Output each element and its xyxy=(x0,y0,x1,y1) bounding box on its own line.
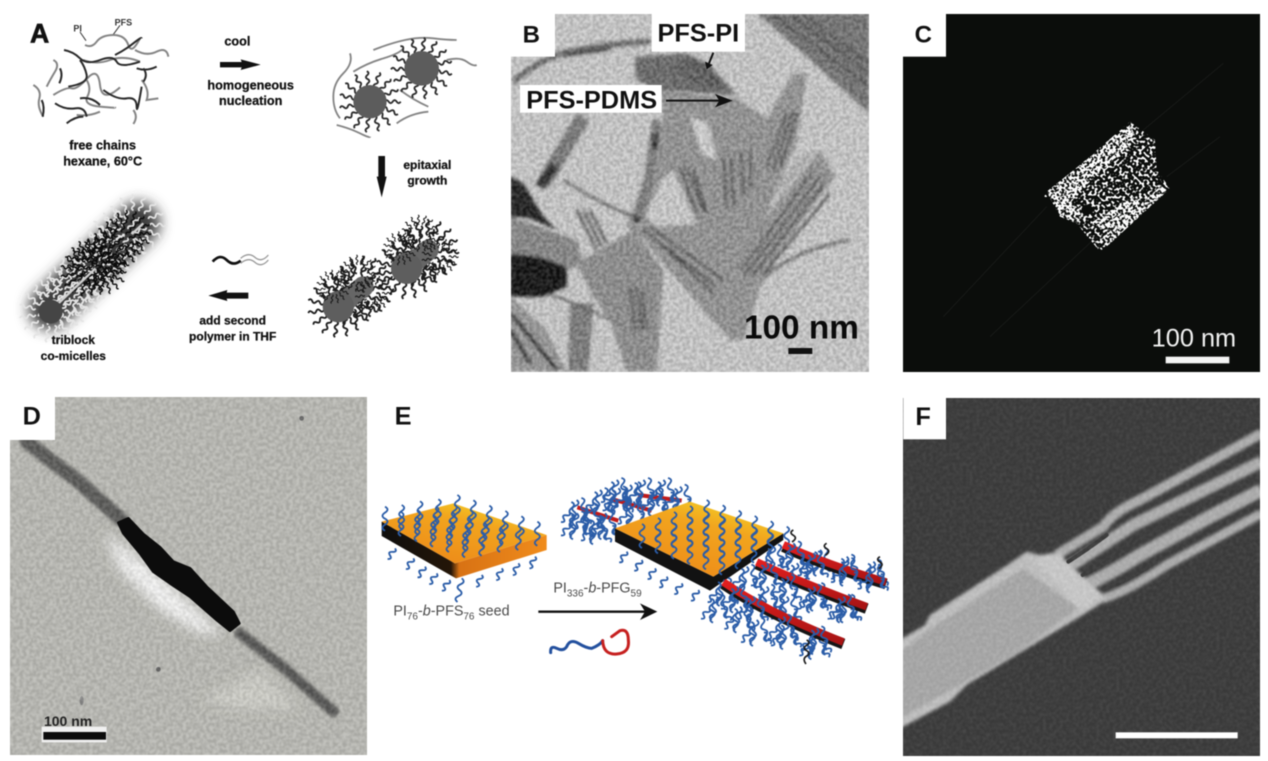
corona chains behind front fibres xyxy=(699,544,889,659)
label: seed polymer: b-PFS xyxy=(423,604,463,620)
corona rings crossing fibres xyxy=(719,530,889,664)
scale bar: 100 nm: 100 nm xyxy=(744,310,859,347)
faint rod outlines xyxy=(943,63,1223,337)
scale bar: 100 nm: 100 nm xyxy=(44,713,92,729)
seed platelet with corona chains xyxy=(382,495,547,602)
free polymer chains with PI and PFS labels: PI xyxy=(73,23,82,33)
panel B: TEM micrograph xyxy=(510,10,869,372)
wide ribbon body xyxy=(900,552,1108,728)
dark central block xyxy=(118,518,239,631)
step label: epitaxial growth xyxy=(403,158,451,187)
icon: diblock copolymer chain xyxy=(551,630,629,654)
label: added polymer: 336 xyxy=(567,589,584,600)
scale bar: 100 nm xyxy=(42,713,107,742)
bright halo xyxy=(103,532,300,710)
front fibres xyxy=(723,545,886,644)
label: added polymer: b-PFG xyxy=(588,581,631,597)
step label: epitaxial growth: epitaxial xyxy=(403,158,451,172)
arrow: left xyxy=(208,290,248,301)
label: seed polymer: - xyxy=(418,604,423,620)
panel letter A: A xyxy=(30,19,49,49)
panel letter F xyxy=(903,398,946,439)
growing platelet with corona chains xyxy=(615,500,789,602)
callout: PFS-PDMS xyxy=(520,85,733,115)
step label: cool, homogeneous nucleation: cool xyxy=(224,34,250,48)
free polymer chains with PI and PFS labels xyxy=(33,17,168,124)
label: seed polymer: seed xyxy=(474,604,510,620)
step label: add second polymer: polymer in THF xyxy=(189,330,276,344)
triblock co-micelle rod with glow xyxy=(20,194,166,342)
callout: PFS-PDMS: PFS-PDMS xyxy=(526,87,657,115)
panel letter D xyxy=(7,395,55,440)
free polymer chains with PI and PFS labels: PFS xyxy=(115,17,132,27)
step label: add second polymer: add second xyxy=(199,314,266,328)
label: added polymer: - xyxy=(584,581,589,597)
step label: epitaxial growth: growth xyxy=(407,173,447,187)
dark gaps between fingers xyxy=(1066,532,1110,578)
panel letter B xyxy=(510,10,555,57)
diagonal rod xyxy=(27,442,333,712)
label: seed polymer: 76 xyxy=(407,612,418,623)
caption: triblock co-micelles: triblock xyxy=(52,333,95,347)
scale bar xyxy=(1116,732,1238,738)
step label: cool, homogeneous nucleation: homogeneous xyxy=(207,78,294,92)
panel letter F: F xyxy=(915,403,931,431)
bright fingers xyxy=(1057,433,1262,598)
arrow: down xyxy=(377,156,387,197)
panel letter C xyxy=(901,11,946,57)
panel C: elemental map on black xyxy=(901,11,1260,372)
label: seed polymer: 76 xyxy=(463,612,475,623)
caption: free chains xyxy=(63,139,142,168)
caption: triblock co-micelles xyxy=(41,333,106,363)
speckled central bright region xyxy=(1043,122,1170,252)
panel letter C: C xyxy=(915,21,932,48)
panel F: SEM micrograph xyxy=(900,398,1262,756)
caption: free chains: free chains xyxy=(69,139,136,153)
label: added polymer: PI xyxy=(553,581,567,597)
step label: add second polymer xyxy=(189,314,276,344)
label: added polymer: 59 xyxy=(631,589,642,600)
arrow: right xyxy=(220,59,261,70)
panel letter D: D xyxy=(23,403,41,431)
label: seed polymer: PI xyxy=(393,604,407,620)
panel A: triblock co-micelle formation scheme xyxy=(20,17,477,363)
panel letter E: E xyxy=(395,403,412,431)
panel E: seeded growth schematic xyxy=(382,403,889,664)
panel letter B: B xyxy=(523,21,540,48)
caption: triblock co-micelles: co-micelles xyxy=(41,349,106,363)
micrograph fibres xyxy=(510,13,869,371)
dark gap in speckles xyxy=(1081,205,1092,215)
scale bar: 100 nm: 100 nm xyxy=(1152,325,1236,353)
callout: PFS-PI xyxy=(652,13,745,69)
rod micelles after epitaxial growth xyxy=(308,215,461,337)
callout: PFS-PI: PFS-PI xyxy=(658,20,739,48)
arrow: reaction xyxy=(538,603,657,620)
icon: second polymer chain xyxy=(213,255,268,265)
specks xyxy=(80,416,304,705)
caption: free chains: hexane, 60°C xyxy=(63,154,142,168)
step label: cool, homogeneous nucleation: nucleation xyxy=(219,94,282,108)
spherical micelles with coronas xyxy=(333,33,477,137)
back fibres with corona xyxy=(559,477,696,544)
panel D: TEM micrograph with dark central block xyxy=(7,395,367,755)
step label: cool, homogeneous nucleation xyxy=(207,34,294,108)
